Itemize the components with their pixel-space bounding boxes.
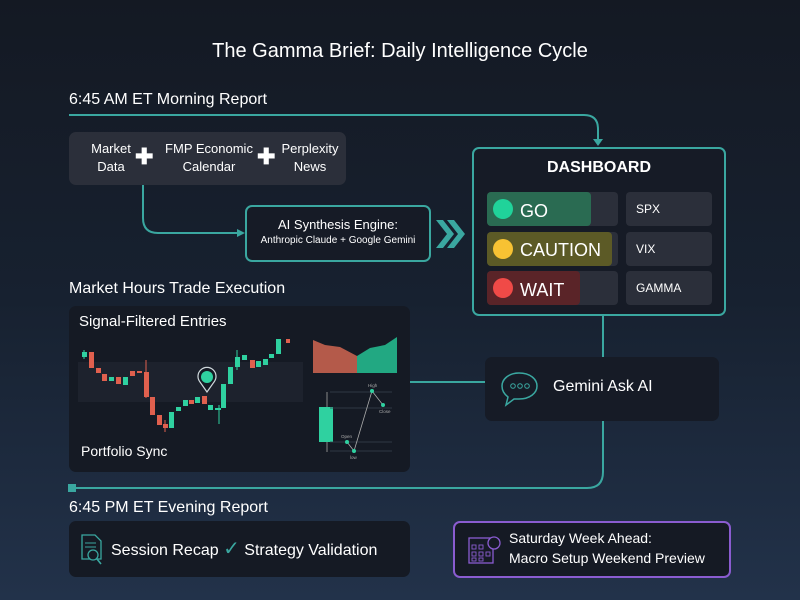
candlestick chart	[78, 337, 397, 460]
candlestick chart: Close	[379, 409, 391, 414]
panel: chart: Portfolio Sync	[81, 443, 167, 459]
panel: chart: Signal-Filtered Entries	[79, 313, 227, 330]
panel: evening recap	[69, 521, 410, 577]
panel: saturday week ahead	[453, 521, 731, 578]
WAIT row: WAIT	[520, 280, 564, 300]
panel: data inputs: Calendar	[183, 159, 235, 174]
candlestick chart: High	[368, 383, 378, 388]
tickers	[626, 192, 712, 226]
panel: data inputs: Perplexity	[281, 141, 339, 156]
panel: dashboard: VIX	[636, 242, 655, 256]
panel: chart	[69, 306, 410, 472]
panel: data inputs: Market	[91, 141, 131, 156]
panel: dashboard: GAMMA	[636, 281, 681, 295]
CAUTION row	[487, 232, 618, 266]
panel: saturday week ahead: Macro Setup Weekend Preview	[509, 550, 705, 566]
panel: Gemini Ask AI	[485, 357, 719, 421]
panel: data inputs: ✚	[135, 144, 153, 169]
panel: data inputs: Data	[97, 159, 125, 174]
panel: dashboard: DASHBOARD	[547, 159, 651, 176]
panel: saturday week ahead: Saturday Week Ahead:	[509, 530, 652, 546]
panel: data inputs	[69, 132, 346, 185]
panel: Gemini Ask AI: Gemini Ask AI	[553, 378, 653, 395]
icon: calendar	[468, 536, 501, 564]
WAIT row	[487, 271, 618, 305]
panel: data inputs: ✚	[257, 144, 275, 169]
icon: chevrons	[436, 220, 465, 248]
heading: market hours: Market Hours Trade Execution	[69, 280, 285, 297]
tickers: SPX	[636, 202, 660, 216]
panel: data inputs: FMP Economic	[165, 141, 253, 156]
panel: dashboard	[472, 147, 726, 316]
icon: document	[81, 534, 102, 564]
heading: evening report: 6:45 PM ET Evening Report	[69, 499, 268, 516]
panel: AI synthesis engine	[245, 205, 431, 262]
panel: data inputs: News	[294, 159, 326, 174]
panel: AI synthesis engine: Anthropic Claude + Google Gemini	[261, 235, 415, 246]
GO row	[487, 192, 618, 226]
heading: morning report: 6:45 AM ET Morning Report	[69, 91, 267, 108]
candlestick chart: low	[350, 455, 358, 460]
GO row: GO	[520, 201, 548, 221]
CAUTION row: CAUTION	[520, 240, 601, 260]
icon: chat bubble	[501, 372, 538, 407]
candlestick chart: Open	[341, 434, 353, 439]
panel: AI synthesis engine: AI Synthesis Engine:	[278, 217, 398, 232]
panel: evening recap: Session Recap ✓ Strategy Validation	[111, 538, 377, 560]
title: The Gamma Brief: Daily Intelligence Cycle	[212, 40, 588, 62]
